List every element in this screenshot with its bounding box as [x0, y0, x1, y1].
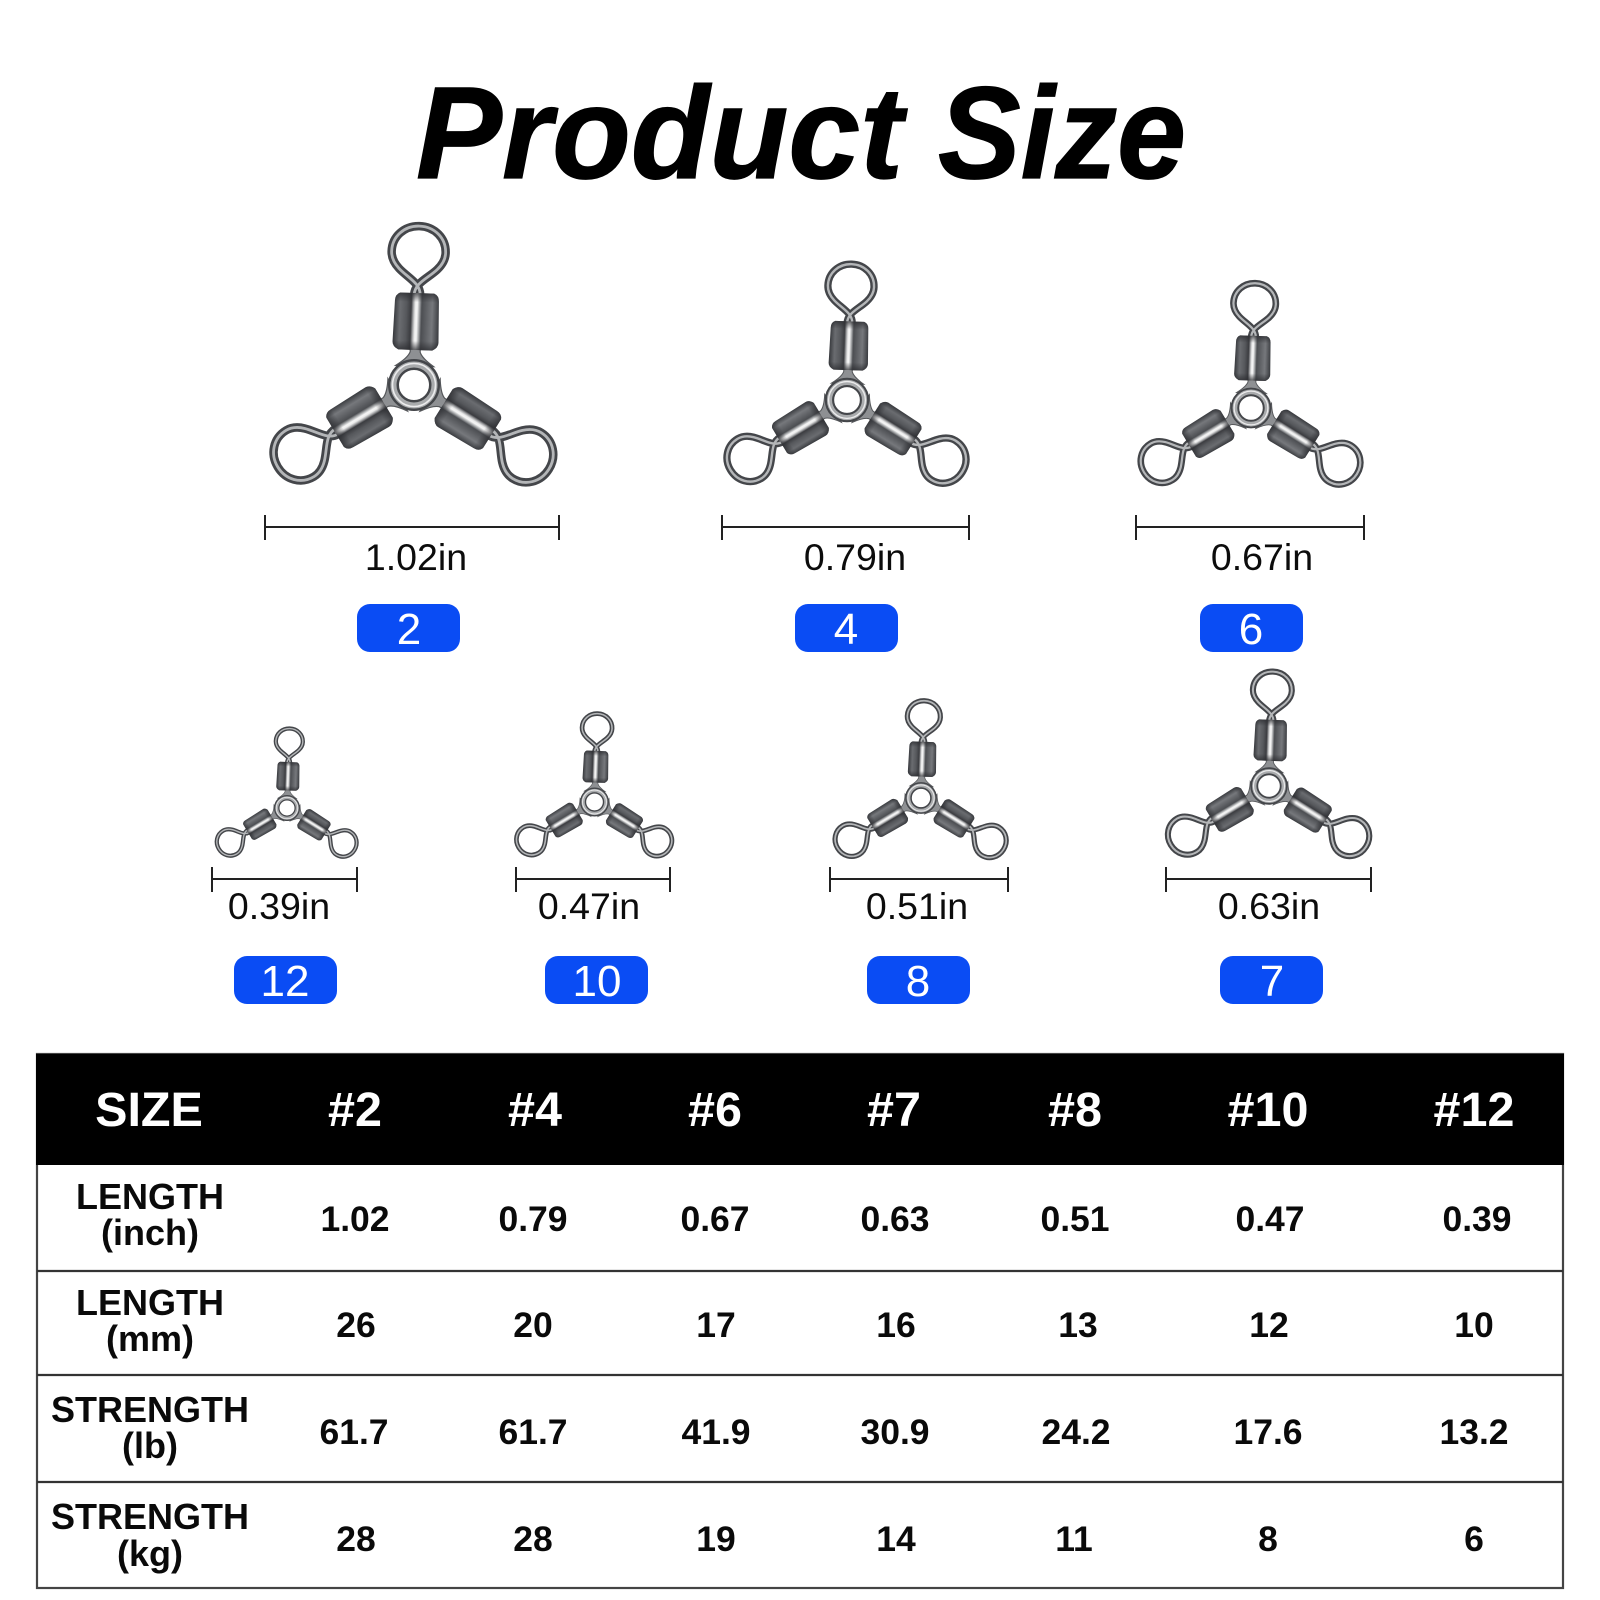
row: strength in pounds: 61.7 — [319, 1412, 389, 1452]
row: length in millimetres: 10 — [1454, 1305, 1494, 1345]
row: length in inches — [76, 1176, 1512, 1253]
length label size 8: 0.51in — [866, 885, 968, 927]
row: strength in kilograms: 11 — [1055, 1519, 1093, 1559]
panel: size 2 — [264, 225, 563, 654]
title: Product — [416, 59, 908, 206]
dimension bracket size 6 — [1136, 515, 1364, 540]
row: length in millimetres: 26 — [336, 1305, 376, 1345]
row: strength in kilograms: 6 — [1464, 1519, 1484, 1559]
badge size 12: 12 — [261, 957, 309, 1006]
table header row: #12 — [1434, 1083, 1514, 1137]
table frame and row lines — [37, 1054, 1563, 1588]
size specification table — [36, 1054, 1564, 1588]
badge size 10: 10 — [573, 957, 621, 1006]
length label size 6: 0.67in — [1211, 536, 1313, 578]
row: length in millimetres: LENGTH — [76, 1282, 224, 1323]
table header row: #8 — [1048, 1083, 1102, 1137]
badge size 2: 2 — [397, 605, 421, 654]
row: strength in pounds: 24.2 — [1041, 1412, 1111, 1452]
row: length in inches: 0.79 — [498, 1199, 568, 1239]
panel: size 8 — [829, 700, 1012, 1006]
icon: three-way swivel size 8 — [829, 700, 1012, 864]
panel: size 12 — [212, 728, 362, 1006]
badge size 2 — [357, 604, 460, 654]
title — [416, 59, 1186, 206]
row: strength in kilograms: (kg) — [117, 1533, 183, 1574]
dimension bracket size 8 — [830, 867, 1008, 892]
panel: size 7 — [1161, 671, 1376, 1006]
row: strength in pounds: 13.2 — [1439, 1412, 1509, 1452]
row: strength in pounds: (lb) — [122, 1425, 178, 1466]
row: strength in pounds: 30.9 — [860, 1412, 930, 1452]
badge size 12 — [234, 956, 337, 1006]
dimension bracket size 7 — [1166, 867, 1371, 892]
dimension bracket size 2 — [265, 515, 559, 540]
table header row: #2 — [328, 1083, 382, 1137]
row: strength in kilograms: 14 — [876, 1519, 916, 1559]
row: length in millimetres — [76, 1282, 1494, 1359]
row: length in millimetres: 13 — [1058, 1305, 1098, 1345]
badge size 6 — [1200, 604, 1303, 654]
row: strength in kilograms — [51, 1496, 1484, 1574]
row: strength in kilograms: 8 — [1258, 1519, 1278, 1559]
panel: size 10 — [511, 713, 677, 1006]
table header row: #10 — [1228, 1083, 1308, 1137]
length label size 7: 0.63in — [1218, 885, 1320, 927]
badge size 7: 7 — [1260, 957, 1284, 1006]
badge size 7 — [1220, 956, 1323, 1006]
row: strength in kilograms: STRENGTH — [51, 1496, 249, 1537]
length label size 12: 0.39in — [228, 885, 330, 927]
badge size 10 — [545, 956, 648, 1006]
table header row: #7 — [867, 1083, 921, 1137]
row: strength in pounds: 17.6 — [1233, 1412, 1303, 1452]
row: length in inches: LENGTH — [76, 1176, 224, 1217]
icon: three-way swivel size 10 — [511, 713, 677, 862]
badge size 8: 8 — [906, 957, 930, 1006]
icon: three-way swivel size 12 — [212, 728, 362, 862]
row: strength in pounds: 41.9 — [681, 1412, 751, 1452]
badge size 4: 4 — [834, 605, 858, 654]
dimension bracket size 12 — [212, 867, 357, 892]
length label size 4: 0.79in — [804, 536, 906, 578]
dimension bracket size 4 — [722, 515, 969, 540]
row: length in inches: 0.51 — [1040, 1199, 1110, 1239]
table header row: #6 — [688, 1083, 742, 1137]
icon: three-way swivel size 2 — [264, 225, 563, 492]
row: strength in kilograms: 28 — [513, 1519, 553, 1559]
row: length in millimetres: 17 — [696, 1305, 736, 1345]
table header row: SIZE — [95, 1083, 203, 1137]
row: length in inches: 0.47 — [1235, 1199, 1305, 1239]
row: length in millimetres: 20 — [513, 1305, 553, 1345]
badge size 4 — [795, 604, 898, 654]
icon: three-way swivel size 6 — [1133, 283, 1368, 492]
row: strength in pounds — [51, 1389, 1509, 1466]
table header row — [36, 1054, 1564, 1165]
row: length in inches: 1.02 — [320, 1199, 390, 1239]
panel: size 4 — [719, 263, 975, 654]
dimension bracket size 10 — [516, 867, 670, 892]
length label size 2: 1.02in — [365, 536, 467, 578]
row: strength in pounds: STRENGTH — [51, 1389, 249, 1430]
row: length in millimetres: (mm) — [106, 1318, 194, 1359]
icon: three-way swivel size 7 — [1161, 671, 1376, 863]
row: strength in pounds: 61.7 — [498, 1412, 568, 1452]
badge size 8 — [867, 956, 970, 1006]
row: strength in kilograms: 19 — [696, 1519, 736, 1559]
row: length in inches: (inch) — [101, 1212, 199, 1253]
badge size 6: 6 — [1239, 605, 1263, 654]
panel: size 6 — [1133, 283, 1368, 654]
row: length in millimetres: 16 — [876, 1305, 916, 1345]
row: strength in kilograms: 28 — [336, 1519, 376, 1559]
length label size 10: 0.47in — [538, 885, 640, 927]
row: length in millimetres: 12 — [1249, 1305, 1289, 1345]
row: length in inches: 0.67 — [680, 1199, 750, 1239]
row: length in inches: 0.63 — [860, 1199, 930, 1239]
icon: three-way swivel size 4 — [719, 263, 975, 492]
row: length in inches: 0.39 — [1442, 1199, 1512, 1239]
title: Size — [938, 59, 1186, 206]
table header row: #4 — [508, 1083, 562, 1137]
